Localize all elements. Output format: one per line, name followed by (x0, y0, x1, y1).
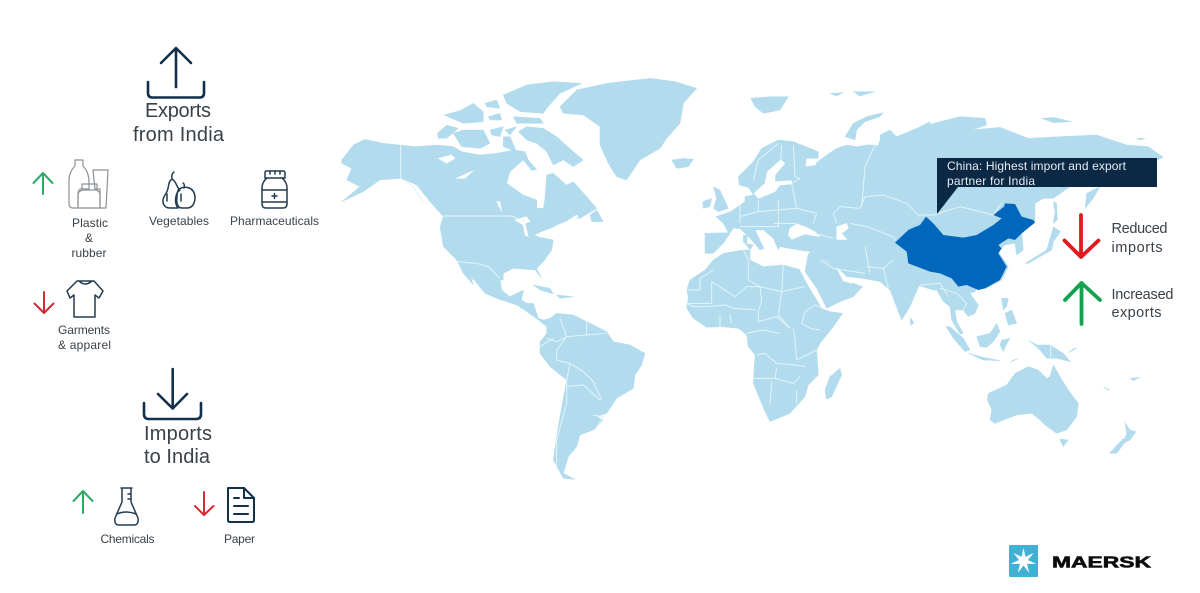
Iceland and Caribbean islands (533, 158, 693, 298)
legend label: increased exports: Increased (1112, 287, 1174, 303)
icon: chemical flask (115, 488, 138, 525)
legend (1064, 215, 1174, 324)
label: garments and apparel: Garments (58, 323, 110, 337)
label: plastic and rubber: Plastic (72, 216, 108, 230)
logo: Maersk (1009, 545, 1152, 577)
heading: imports to India: to India (144, 446, 211, 468)
Mexico and Central America (457, 260, 560, 327)
Africa (687, 250, 843, 422)
panel: imports to India (74, 369, 255, 546)
icon: pharmaceuticals jar (262, 171, 287, 208)
mainland Southeast Asia (933, 283, 980, 334)
label: vegetables: Vegetables (149, 214, 209, 228)
label: garments and apparel: & apparel (58, 338, 111, 352)
callout: China (937, 158, 1157, 214)
South America (540, 313, 645, 479)
North America north section (342, 82, 603, 280)
Arctic archipelago (437, 82, 603, 222)
Europe and western Russia (703, 92, 930, 260)
inland seas (754, 159, 850, 250)
heading: exports from India (133, 100, 225, 146)
label: garments and apparel (58, 323, 111, 352)
borders (457, 262, 607, 470)
Madagascar (825, 368, 842, 399)
label: plastic and rubber: rubber (72, 246, 106, 260)
callout text: China: Highest import and export (947, 159, 1127, 173)
borders (940, 288, 1051, 359)
icon: export upload arrow (148, 48, 204, 98)
legend label: increased exports (1112, 287, 1174, 321)
label: plastic and rubber: & (85, 231, 93, 245)
logo star tile (1009, 545, 1038, 577)
icon: paper document (228, 488, 254, 522)
label: pharmaceuticals: Pharmaceuticals (230, 214, 319, 228)
label: paper: Paper (224, 532, 255, 546)
icon: green up arrow plastic (34, 173, 52, 194)
logo wordmark: MAERSK (1052, 554, 1152, 572)
Southeast Asia and Oceania (933, 283, 1140, 453)
borders (401, 145, 525, 222)
East Asia islands (1025, 117, 1145, 263)
label: chemicals: Chemicals (100, 532, 154, 546)
world map (342, 78, 1163, 479)
legend label: reduced imports (1112, 221, 1168, 256)
East Asia (867, 117, 1163, 290)
heading: imports to India (144, 423, 212, 468)
Iran and India (807, 240, 920, 320)
heading: imports to India: Imports (144, 423, 212, 445)
legend label: reduced imports: Reduced (1112, 221, 1168, 237)
islands of Indonesia, Philippines, New Guinea, New Zealand (946, 298, 1140, 453)
Arabia (805, 253, 863, 308)
icon: vegetables (163, 172, 195, 208)
icon: red down arrow paper (195, 492, 214, 515)
lakes (438, 155, 578, 237)
Greenland (560, 78, 697, 180)
Africa and South Asia (687, 240, 920, 422)
heading: exports from India: Exports (145, 100, 211, 122)
heading: exports from India: from India (133, 124, 225, 146)
Americas south and Greenland (457, 78, 697, 479)
callout text: partner for India (947, 174, 1035, 188)
Canada, Alaska and United States (342, 139, 597, 280)
legend label: reduced imports: imports (1112, 240, 1162, 256)
icon: red down arrow garments (34, 292, 54, 313)
panel: exports from India (34, 48, 319, 352)
callout text (947, 159, 1127, 188)
icon: green up arrow (1065, 283, 1100, 324)
icon: t-shirt (67, 281, 103, 317)
Sri Lanka (910, 317, 914, 325)
icon: import download arrow (144, 369, 201, 419)
Persian Gulf (837, 268, 855, 283)
borders (687, 247, 893, 405)
legend label: increased exports: exports (1112, 305, 1162, 321)
Australia (987, 365, 1078, 433)
European islands (703, 92, 883, 250)
borders (740, 143, 920, 260)
China highlighted (895, 203, 1035, 290)
Asia borders (920, 203, 1002, 297)
icon: red down arrow (1064, 215, 1098, 257)
icon: green up arrow chemicals (74, 491, 92, 513)
label: plastic and rubber (72, 216, 108, 260)
icon: plastic and rubber products (69, 160, 108, 208)
